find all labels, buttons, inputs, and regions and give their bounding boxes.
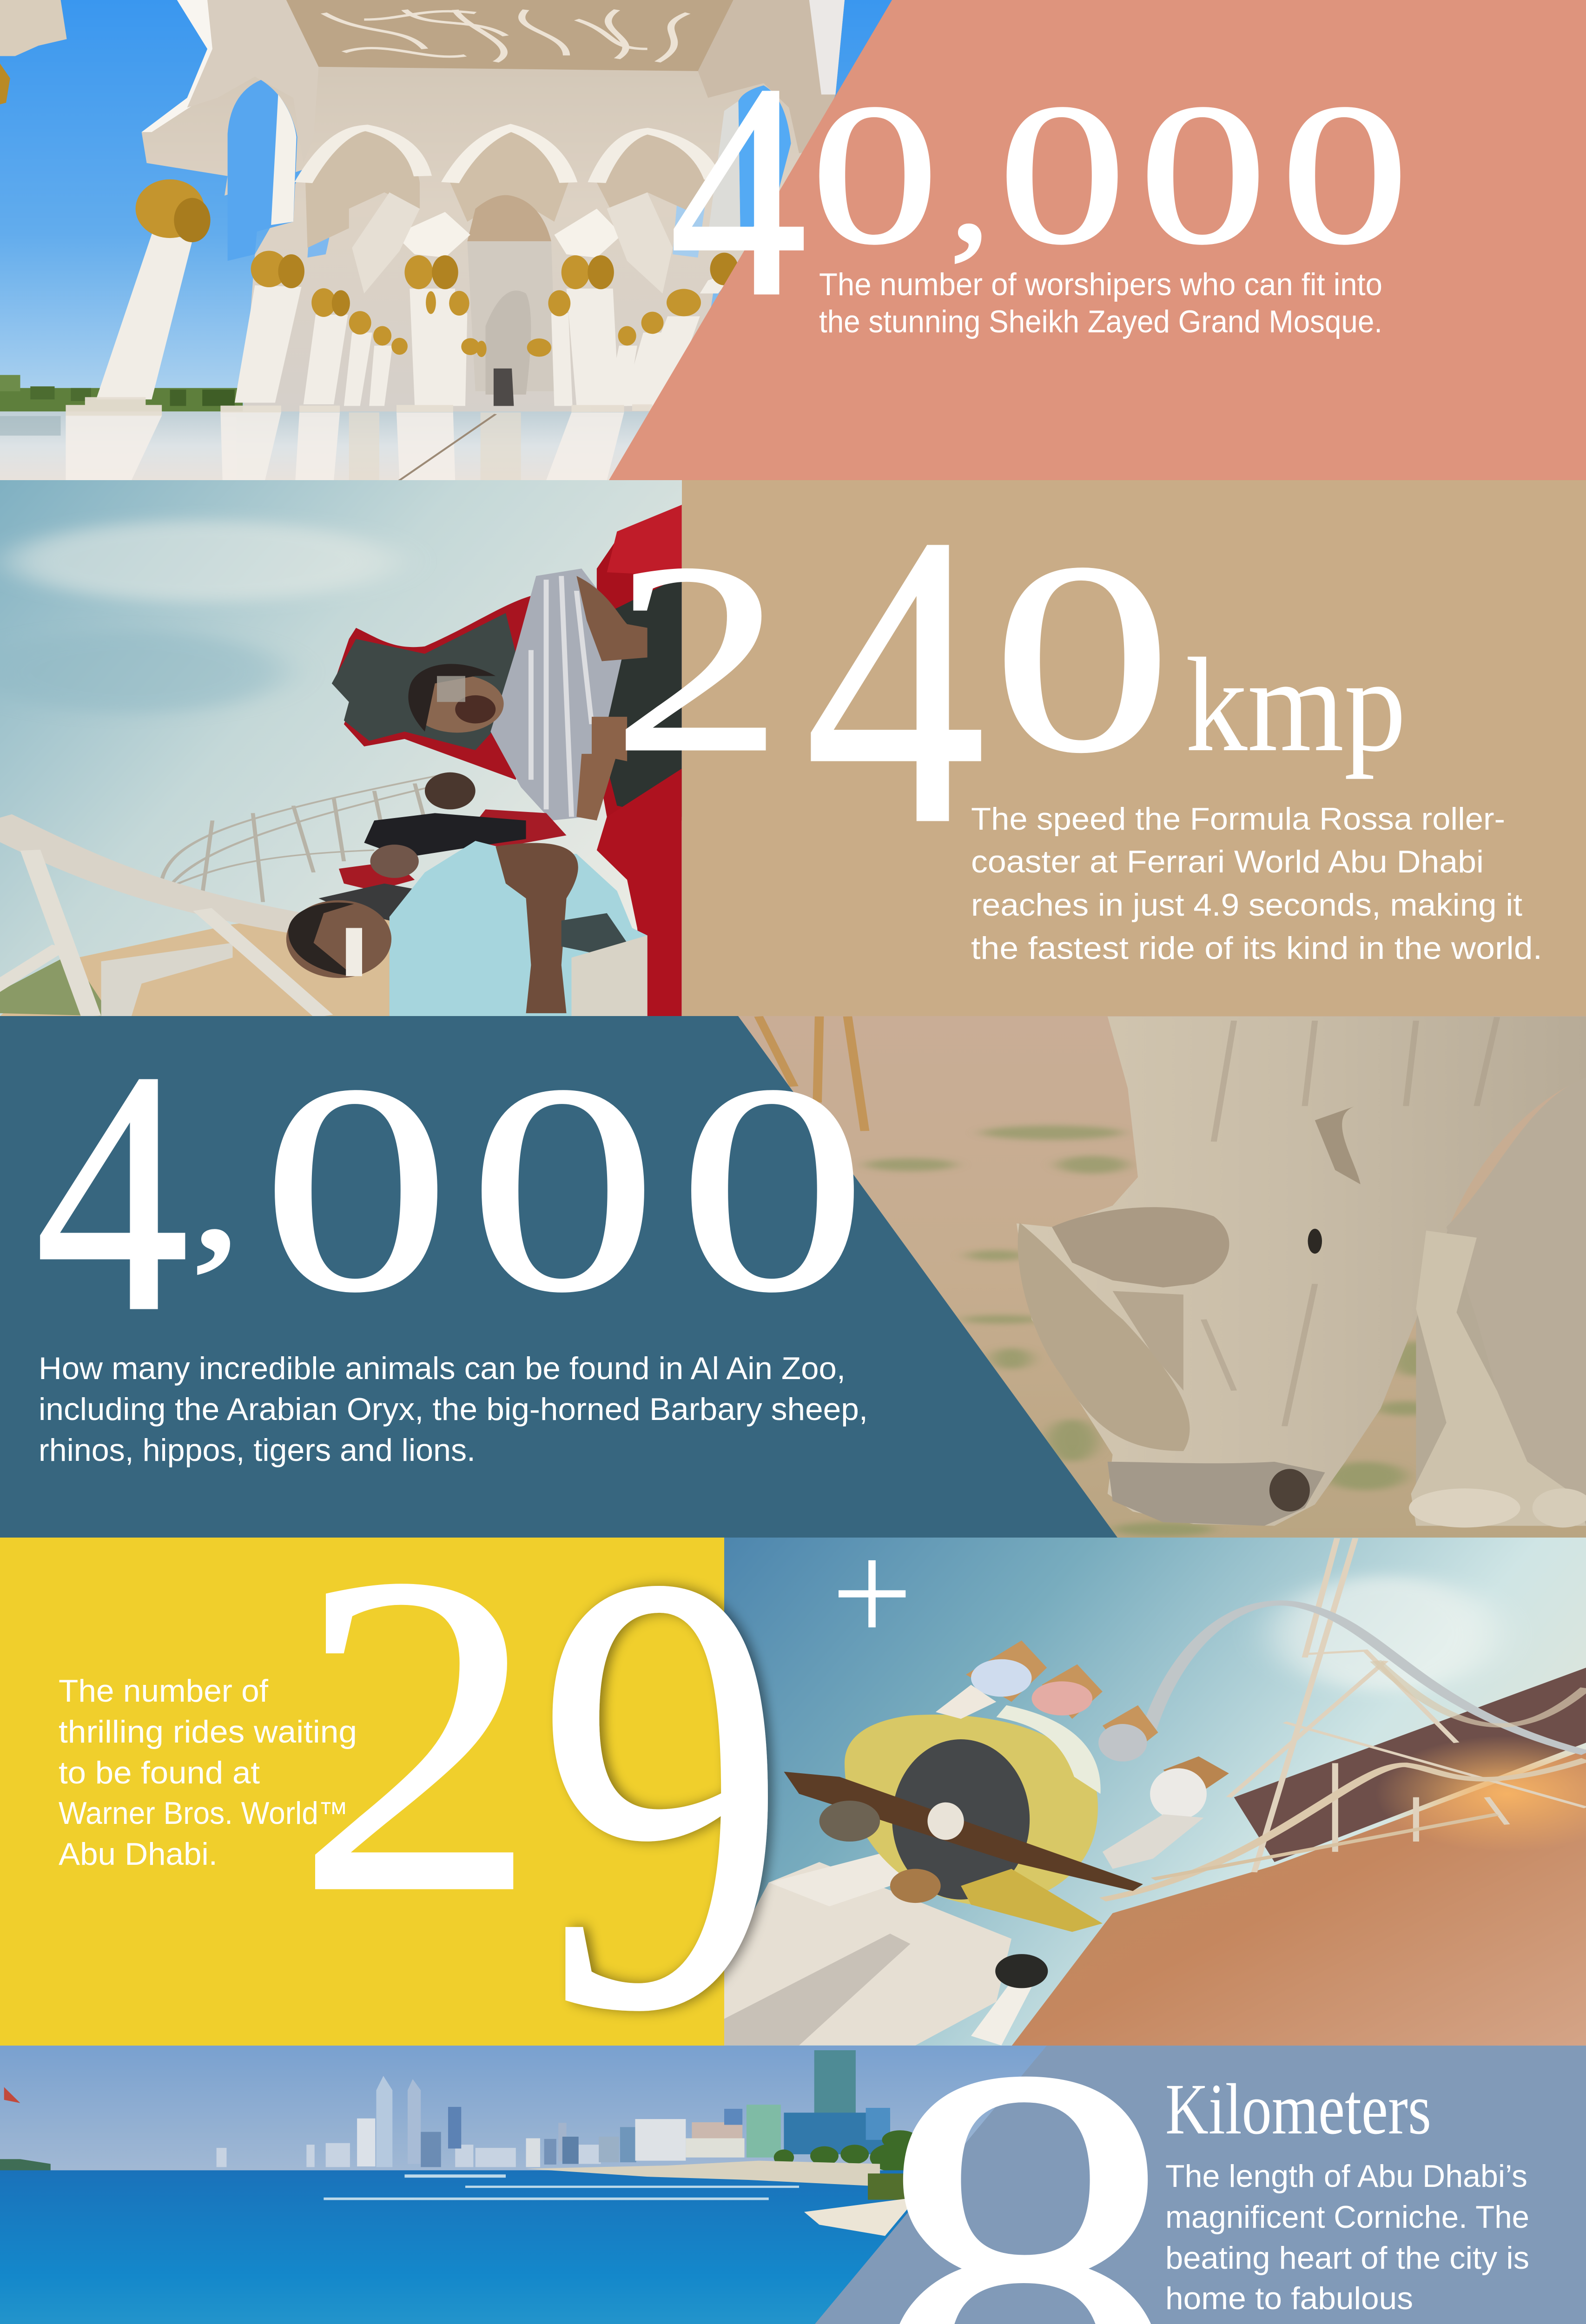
coloured panel: yellow background [0,1538,724,2046]
description: worshipers: The number of worshipers who can fit into [819,267,1382,302]
panel: 8 kilometers Corniche [0,1942,1586,2324]
description: worshipers [819,267,1382,339]
big number: 40,000: 0 [1139,63,1267,285]
description: roller-coaster speed: the fastest ride of its kind in the world. [971,931,1542,966]
description: thrilling rides: thrilling rides waiting [59,1714,357,1750]
big number: 240 kmp: 4 [805,449,986,910]
photo: roller-coaster riders [0,476,698,1021]
description: roller-coaster speed: reaches in just 4.9 seconds, making it [971,887,1522,923]
big number: 4,000: 0 [469,1024,657,1353]
big number: 40,000: 0 [1281,63,1408,285]
photo: Sheikh Zayed Grand Mosque colonnade [0,0,892,480]
description: roller-coaster speed [971,801,1542,966]
description: thrilling rides: Warner Bros. World™ [59,1796,348,1831]
description: thrilling rides: to be found at [59,1755,260,1790]
description: thrilling rides: Abu Dhabi. [59,1836,218,1872]
panel: 29+ rides [0,1443,1586,2140]
big number: 240 kmp: 2 [612,508,783,808]
big number: 240 kmp [612,449,1406,910]
description: Corniche [1165,2159,1568,2324]
photo: Corniche beach and skyline [0,2042,1113,2324]
big number: 40,000: 4 [669,21,807,360]
big number: 4,000: 4 [35,1000,189,1383]
panel: 40,000 worshipers [0,0,1586,480]
big number: 29 [295,1443,787,2140]
big number: 40,000: 0 [998,63,1126,285]
big number: 40,000: 0 [811,63,938,285]
description: Corniche: home to fabulous [1165,2281,1413,2316]
description: Corniche: beating heart of the city is [1165,2240,1529,2276]
panel: 240 kmp Formula Rossa [0,449,1586,1021]
description: thrilling rides: The number of [59,1673,268,1709]
photo: grazing rhino at Al Ain Zoo [708,1014,1586,1540]
big number: 4,000: 0 [262,1024,450,1353]
big number: 40,000 [669,21,1408,360]
heading: Kilometers: Kilometers [1165,2069,1431,2149]
description: animals: rhinos, hippos, tigers and lions. [39,1433,476,1468]
description: roller-coaster speed: coaster at Ferrari World Abu Dhabi [971,844,1484,879]
big number: 29: 9 [537,1443,787,2140]
coloured panel: teal slanted background [0,1016,1117,1538]
description: worshipers: the stunning Sheikh Zayed Grand Mosque. [819,304,1382,339]
coloured panel: salmon slanted background [609,0,1586,480]
plus sign: + [832,1514,912,1673]
coloured panel: tan background [682,480,1586,1016]
description: roller-coaster speed: The speed the Formula Rossa roller- [971,801,1505,837]
big number: 4,000: 0 [678,1024,867,1353]
description: thrilling rides [59,1673,357,1872]
coloured panel: slate-blue slanted background [650,2046,1586,2324]
description: animals [39,1351,868,1468]
big number: 4,000 [35,1000,867,1383]
description: animals: including the Arabian Oryx, the big-horned Barbary sheep, [39,1392,868,1427]
big number: 4,000: , [191,1098,241,1284]
description: Corniche: The length of Abu Dhabi’s [1165,2159,1527,2194]
photo: Warner Bros. World plane ride [708,1535,1586,2049]
description: animals: How many incredible animals can be found in Al Ain Zoo, [39,1351,846,1386]
big number: 240 kmp: kmp [1185,630,1406,779]
panel: 4,000 animals [0,1000,1586,1540]
big number: 29: 2 [295,1480,539,1987]
description: Corniche: magnificent Corniche. The [1165,2199,1529,2235]
big number: 40,000: , [950,109,991,272]
big number: 240 kmp: 0 [992,508,1172,808]
